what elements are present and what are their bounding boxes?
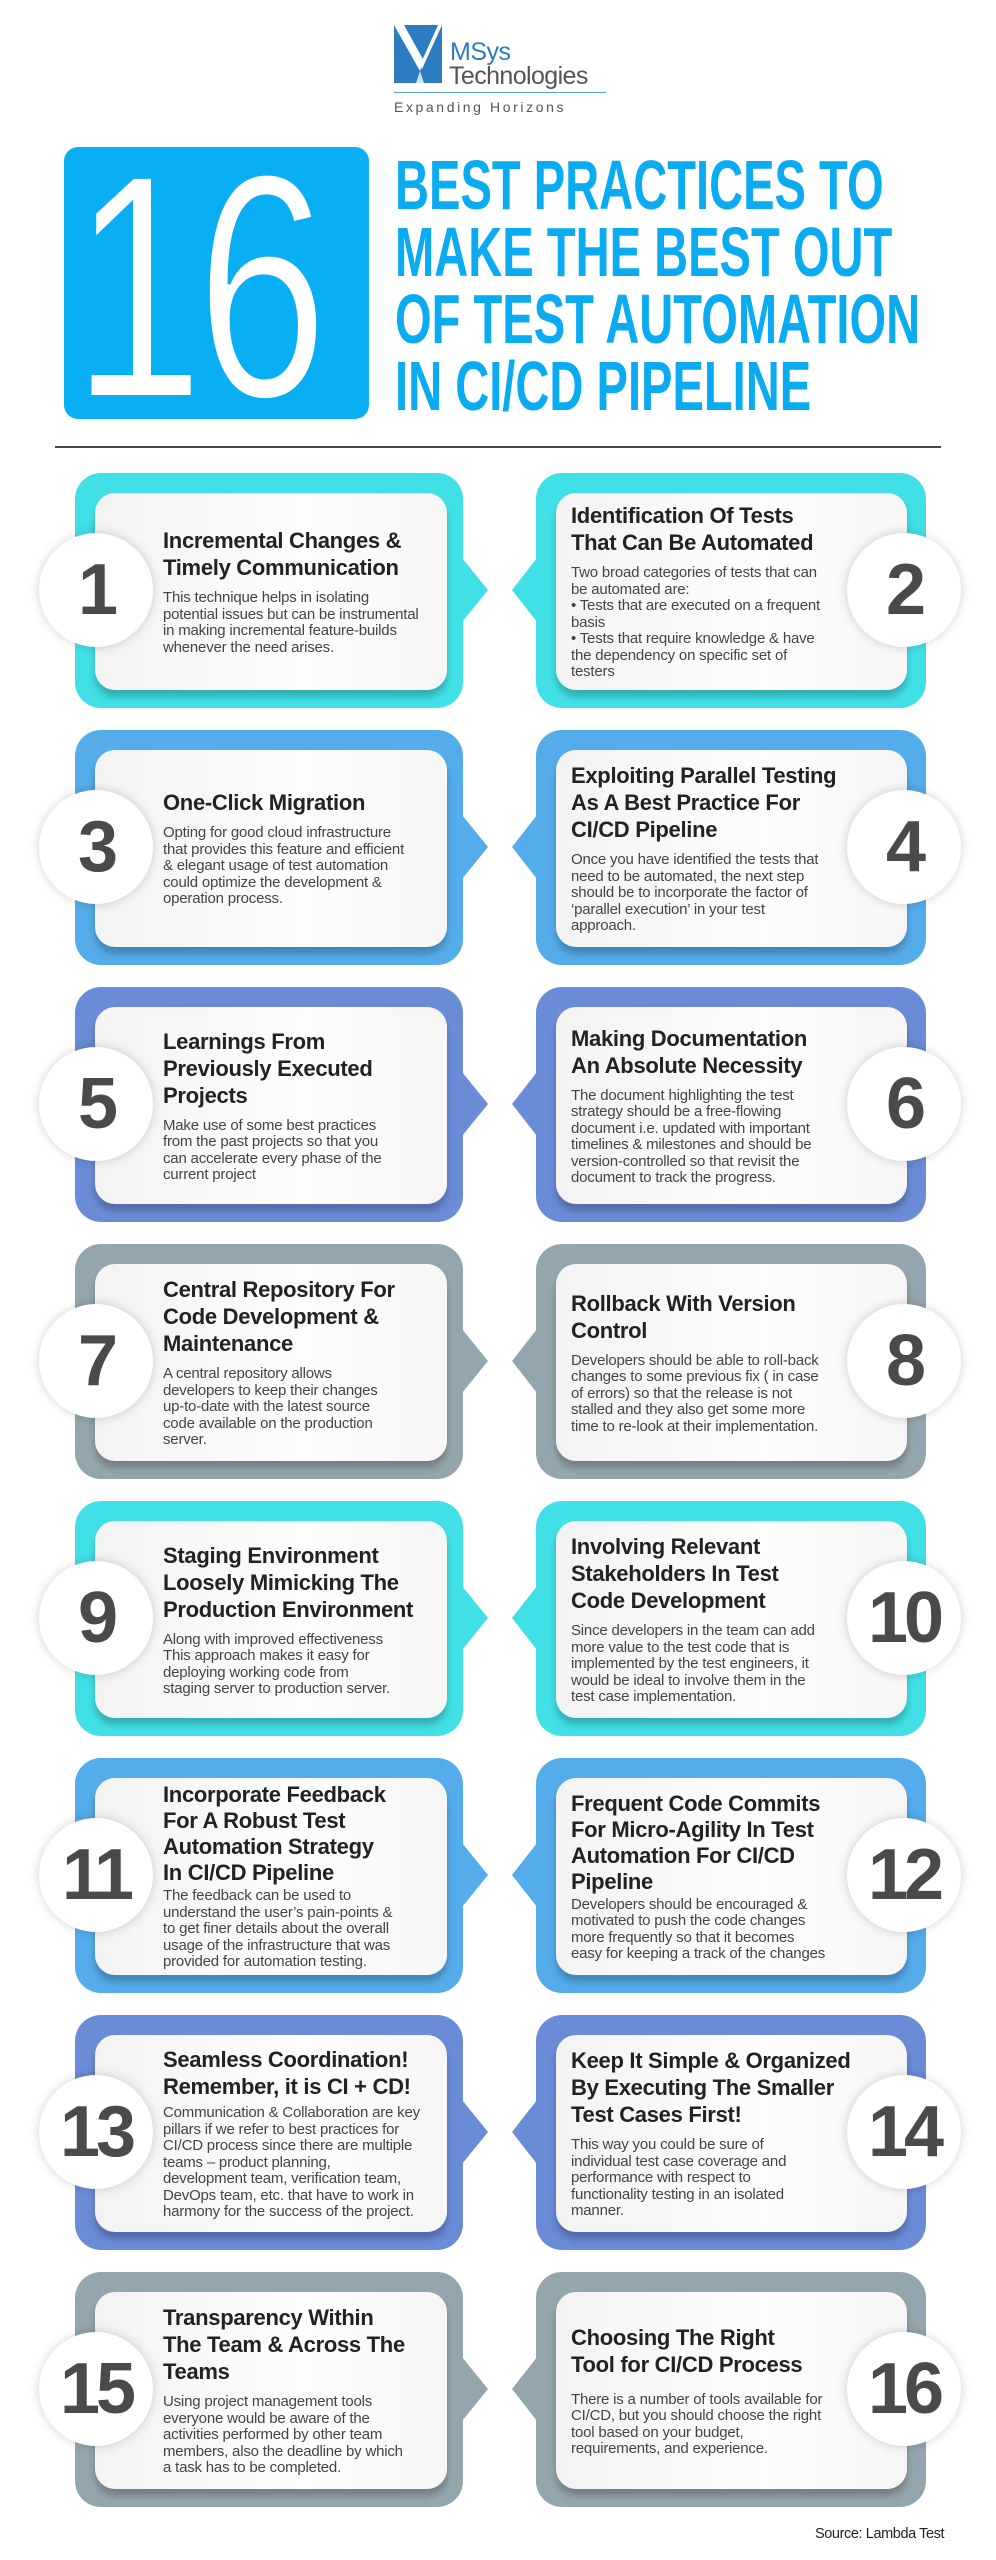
card 12: motivated to push the code changes — [571, 1912, 805, 1929]
card 4: should be to incorporate the factor of — [571, 884, 808, 901]
card 8: stalled and they also get some more — [571, 1401, 805, 1418]
card 5: Projects — [163, 1082, 247, 1108]
number 1: 1 — [78, 550, 114, 630]
number 15 — [39, 2332, 153, 2446]
card 1: in making incremental feature-builds — [163, 622, 397, 639]
card 9 — [35, 1501, 488, 1736]
card 4: CI/CD Pipeline — [571, 817, 717, 842]
card 5: Learnings From — [163, 1028, 325, 1054]
card 12: For Micro-Agility In Test — [571, 1816, 814, 1842]
logo text: MSys: MSys — [450, 38, 510, 66]
card 9: deploying working code from — [163, 1664, 349, 1680]
card 10: Code Development — [571, 1588, 765, 1613]
number 16: 16 — [868, 2349, 940, 2429]
number 12: 12 — [868, 1835, 940, 1915]
card 1 — [35, 473, 488, 708]
number 7 — [39, 1304, 153, 1418]
card 10: would be ideal to involve them in the — [571, 1672, 805, 1689]
title: MAKE THE BEST OUT — [395, 213, 892, 291]
card 11: provided for automation testing. — [163, 1953, 367, 1970]
card 4: Exploiting Parallel Testing — [571, 763, 836, 788]
card 16: Tool for CI/CD Process — [571, 2352, 802, 2376]
card 5: Previously Executed — [163, 1056, 373, 1080]
number 5 — [39, 1047, 153, 1161]
card 8 — [512, 1244, 965, 1479]
card 12: easy for keeping a track of the changes — [571, 1945, 825, 1962]
card 9: Staging Environment — [163, 1542, 379, 1568]
card 12 — [512, 1758, 965, 1993]
number 10 — [847, 1561, 961, 1675]
card 15: Teams — [163, 2359, 230, 2384]
card 5: can accelerate every phase of the — [163, 1150, 382, 1166]
card 6: document i.e. updated with important — [571, 1120, 810, 1136]
card 7: Central Repository For — [163, 1277, 395, 1302]
card 11: to get finer details about the overall — [163, 1920, 389, 1937]
card 8: Rollback With Version — [571, 1291, 796, 1316]
card 3: Opting for good cloud infrastructure — [163, 824, 391, 841]
card 2: • Tests that are executed on a frequent — [571, 597, 820, 614]
number 3: 3 — [78, 807, 114, 887]
card 8: changes to some previous fix ( in case — [571, 1368, 819, 1385]
title: BEST PRACTICES TO — [395, 146, 884, 224]
card 2: be automated are: — [571, 581, 689, 598]
card 1: This technique helps in isolating — [163, 589, 369, 606]
card 13: development team, verification team, — [163, 2170, 401, 2187]
card 5: from the past projects so that you — [163, 1133, 378, 1150]
card 4: approach. — [571, 917, 636, 934]
number 2: 2 — [886, 550, 922, 630]
number 14 — [847, 2075, 961, 2189]
card 6: document to track the progress. — [571, 1169, 776, 1186]
card 15: everyone would be aware of the — [163, 2410, 370, 2427]
card 14: By Executing The Smaller — [571, 2075, 834, 2100]
card 14: Test Cases First! — [571, 2102, 742, 2127]
title: OF TEST AUTOMATION — [395, 280, 920, 358]
card 14: performance with respect to — [571, 2169, 751, 2186]
card 7: developers to keep their changes — [163, 1382, 378, 1399]
card 2: testers — [571, 663, 615, 680]
card 14: functionality testing in an isolated — [571, 2186, 784, 2203]
number 10: 10 — [868, 1578, 940, 1658]
card 3 — [35, 730, 488, 965]
card 6: version-controlled so that revisit the — [571, 1152, 799, 1170]
card 15: The Team & Across The — [163, 2332, 405, 2357]
card 16: requirements, and experience. — [571, 2440, 768, 2457]
card 11: The feedback can be used to — [163, 1887, 351, 1904]
card 13: Seamless Coordination! — [163, 2047, 408, 2072]
card 3: that provides this feature and efficient — [163, 841, 404, 858]
card 11: Automation Strategy — [163, 1834, 374, 1859]
logo — [394, 25, 606, 115]
card 7: server. — [163, 1431, 207, 1448]
card 15: members, also the deadline by which — [163, 2443, 403, 2460]
card 11: For A Robust Test — [163, 1808, 345, 1833]
card 2: Identification Of Tests — [571, 503, 794, 528]
number 12 — [847, 1818, 961, 1932]
card 7: code available on the production — [163, 1415, 373, 1432]
card 15: a task has to be completed. — [163, 2459, 341, 2476]
card 13: Communication & Collaboration are key — [163, 2104, 420, 2121]
number 7: 7 — [78, 1321, 114, 1401]
card 15: Transparency Within — [163, 2305, 374, 2330]
card 11: In CI/CD Pipeline — [163, 1860, 334, 1885]
card 14: Keep It Simple & Organized — [571, 2048, 850, 2073]
card 10 — [512, 1501, 965, 1736]
card 4: As A Best Practice For — [571, 790, 800, 815]
number 9 — [39, 1561, 153, 1675]
card 1: potential issues but can be instrumental — [163, 606, 418, 622]
number 14: 14 — [868, 2092, 940, 2172]
card 16: Choosing The Right — [571, 2324, 775, 2350]
card 11 — [35, 1758, 488, 1993]
card 9: Loosely Mimicking The — [163, 1570, 399, 1594]
logo tagline: Expanding Horizons — [394, 99, 566, 115]
number 5: 5 — [78, 1064, 114, 1144]
card 1: Timely Communication — [163, 555, 399, 580]
card 15: activities performed by other team — [163, 2426, 382, 2443]
card 2: • Tests that require knowledge & have — [571, 630, 815, 647]
card 2: That Can Be Automated — [571, 530, 813, 555]
card 7: up-to-date with the latest source — [163, 1398, 370, 1415]
card 6: strategy should be a free-flowing — [571, 1103, 781, 1120]
card 7: A central repository allows — [163, 1365, 332, 1382]
card 12: Pipeline — [571, 1868, 653, 1894]
card 15: Using project management tools — [163, 2393, 372, 2410]
number 8 — [847, 1304, 961, 1418]
card 2: basis — [571, 614, 605, 631]
number 9: 9 — [78, 1578, 114, 1658]
card 1: Incremental Changes & — [163, 528, 401, 553]
card 13: DevOps team, etc. that have to work in — [163, 2187, 414, 2204]
number 11 — [39, 1818, 153, 1932]
card 8: Control — [571, 1318, 647, 1343]
card 4: Once you have identified the tests that — [571, 851, 818, 868]
number 3 — [39, 790, 153, 904]
card 14 — [512, 2015, 965, 2250]
number 6 — [847, 1047, 961, 1161]
card 13 — [35, 2015, 488, 2250]
card 11: Incorporate Feedback — [163, 1782, 386, 1807]
card 16: tool based on your budget, — [571, 2424, 743, 2440]
number 11: 11 — [62, 1835, 130, 1915]
card 13: CI/CD process since there are multiple — [163, 2137, 412, 2154]
source note: Source: Lambda Test — [815, 2526, 944, 2542]
card 6: The document highlighting the test — [571, 1086, 794, 1104]
card 12: Automation For CI/CD — [571, 1842, 795, 1868]
card 16: CI/CD, but you should choose the right — [571, 2407, 821, 2424]
card 5: current project — [163, 1166, 256, 1183]
card 7: Maintenance — [163, 1331, 293, 1356]
card 13: harmony for the success of the project. — [163, 2203, 414, 2220]
card 5: Make use of some best practices — [163, 1116, 376, 1134]
number 4: 4 — [886, 807, 922, 887]
card 16: There is a number of tools available for — [571, 2390, 822, 2408]
icon: logo mark — [394, 25, 442, 83]
card 7: Code Development & — [163, 1304, 379, 1329]
card 10: Since developers in the team can add — [571, 1622, 815, 1639]
card 9: staging server to production server. — [163, 1680, 390, 1697]
card 4 — [512, 730, 965, 965]
card 9: Production Environment — [163, 1596, 413, 1622]
card 12: Frequent Code Commits — [571, 1790, 820, 1816]
card 8: of errors) so that the release is not — [571, 1385, 792, 1402]
card 13: teams – product planning, — [163, 2154, 331, 2171]
number 16 — [847, 2332, 961, 2446]
title: IN CI/CD PIPELINE — [395, 347, 811, 425]
card 3: & elegant usage of test automation — [163, 857, 388, 874]
card 13: pillars if we refer to best practices for — [163, 2121, 399, 2138]
card 8: Developers should be able to roll-back — [571, 1352, 819, 1369]
card 4: ‘parallel execution’ in your test — [571, 901, 765, 918]
number 13 — [39, 2075, 153, 2189]
card 13: Remember, it is CI + CD! — [163, 2074, 411, 2099]
card 12: more frequently so that it becomes — [571, 1928, 794, 1946]
number 6: 6 — [886, 1064, 922, 1144]
card 12: Developers should be encouraged & — [571, 1896, 807, 1912]
card 6: timelines & milestones and should be — [571, 1136, 811, 1153]
card 7 — [35, 1244, 488, 1479]
logo text: Technologies: Technologies — [449, 62, 588, 90]
card 2 — [512, 473, 965, 708]
card 3: operation process. — [163, 890, 283, 907]
number 13: 13 — [60, 2092, 132, 2172]
card 10: test case implementation. — [571, 1688, 736, 1705]
card 10: Stakeholders In Test — [571, 1561, 779, 1586]
card 3: could optimize the development & — [163, 874, 382, 891]
number 15: 15 — [60, 2349, 132, 2429]
card 8: time to re-look at their implementation. — [571, 1418, 818, 1435]
number 1 — [39, 533, 153, 647]
card 10: more value to the test code that is — [571, 1639, 789, 1656]
card 2: Two broad categories of tests that can — [571, 564, 817, 581]
card 14: This way you could be sure of — [571, 2136, 764, 2153]
card 14: individual test case coverage and — [571, 2153, 786, 2170]
number 4 — [847, 790, 961, 904]
number 2 — [847, 533, 961, 647]
title — [395, 146, 920, 425]
card 11: usage of the infrastructure that was — [163, 1937, 390, 1954]
card 9: This approach makes it easy for — [163, 1647, 369, 1664]
card 4: need to be automated, the next step — [571, 868, 804, 885]
card 14: manner. — [571, 2202, 624, 2219]
card 16 — [512, 2272, 965, 2507]
card 6 — [512, 987, 965, 1222]
card 11: understand the user’s pain-points & — [163, 1904, 392, 1921]
card 15 — [35, 2272, 488, 2507]
number 8: 8 — [886, 1321, 922, 1401]
card 10: implemented by the test engineers, it — [571, 1655, 809, 1672]
card 1: whenever the need arises. — [163, 638, 334, 656]
card 10: Involving Relevant — [571, 1534, 760, 1559]
card 6: Making Documentation — [571, 1026, 807, 1050]
card 6: An Absolute Necessity — [571, 1052, 802, 1078]
card 2: the dependency on specific set of — [571, 647, 787, 664]
card 9: Along with improved effectiveness — [163, 1630, 383, 1648]
card 3: One-Click Migration — [163, 790, 365, 815]
card 5 — [35, 987, 488, 1222]
